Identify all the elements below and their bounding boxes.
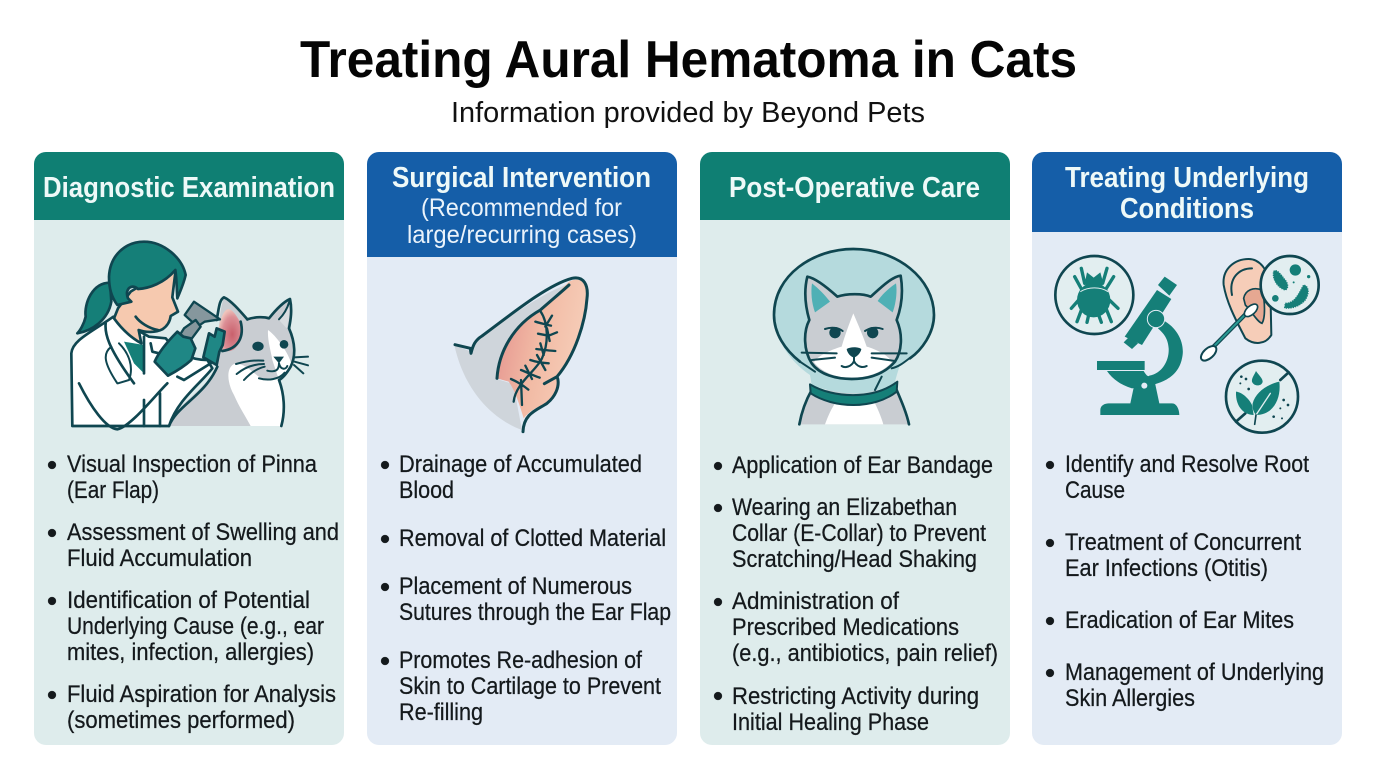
title: Treating Aural Hematoma in Cats: [300, 31, 1077, 89]
coat: [71, 317, 212, 426]
list: diagnostic steps: mites, infection, allergies): [67, 639, 314, 666]
list: surgical steps: Placement of Numerous: [399, 573, 632, 600]
header: surgical intervention: (Recommended for: [421, 194, 622, 222]
list: post-operative steps: Prescribed Medications: [732, 614, 959, 641]
ponytail: [77, 283, 111, 333]
list: surgical steps: Blood: [399, 477, 454, 504]
list: underlying conditions: Cause: [1065, 477, 1125, 504]
header: treating underlying conditions: Conditions: [1120, 193, 1254, 225]
header: surgical intervention: [367, 152, 677, 257]
list: post-operative steps: Application of Ear Bandage: [732, 452, 993, 479]
otoscope: [176, 302, 220, 347]
subtitle: Information provided by Beyond Pets: [451, 97, 925, 129]
head: [805, 276, 902, 379]
list: post-operative steps: Wearing an Elizabethan: [732, 494, 957, 521]
header: surgical intervention: large/recurring cases): [407, 221, 637, 249]
header: post-operative care: Post-Operative Care: [729, 172, 980, 204]
icon: ear mite: [1055, 256, 1133, 334]
list: diagnostic steps: Identification of Potential: [67, 587, 310, 614]
list: underlying conditions: Skin Allergies: [1065, 685, 1195, 712]
hair: [109, 242, 186, 305]
list: post-operative steps: Restricting Activity during: [732, 683, 979, 710]
icon group: causes and diagnosis: [1055, 256, 1319, 433]
panel: diagnostic examination: [34, 152, 344, 745]
stethoscope: [106, 343, 131, 383]
icon: microscope: [1097, 277, 1183, 415]
panel: surgical intervention: [367, 152, 677, 745]
list: surgical steps: Re-filling: [399, 699, 483, 726]
list: surgical steps: [381, 451, 671, 726]
header: diagnostic examination: [34, 152, 344, 220]
header: treating underlying conditions: [1032, 152, 1342, 232]
list: post-operative steps: Scratching/Head Shaking: [732, 546, 977, 573]
gloves: [155, 332, 195, 376]
list: diagnostic steps: (Ear Flap): [67, 477, 159, 504]
icon: ear with cotton swab: [1198, 256, 1319, 363]
list: diagnostic steps: Fluid Accumulation: [67, 545, 252, 572]
list: diagnostic steps: Underlying Cause (e.g., ear: [67, 613, 324, 640]
list: surgical steps: Promotes Re-adhesion of: [399, 647, 642, 674]
list: surgical steps: Skin to Cartilage to Prevent: [399, 673, 661, 700]
list: post-operative steps: Collar (E-Collar) to Prevent: [732, 520, 986, 547]
list: underlying conditions: Treatment of Concurrent: [1065, 529, 1301, 556]
list: post-operative steps: (e.g., antibiotics, pain relief): [732, 640, 998, 667]
icon: vet examining cat's ear: [71, 242, 308, 429]
header: treating underlying conditions: Treating Underlying: [1065, 162, 1309, 194]
icon: cat in e-collar: [774, 249, 934, 424]
list: underlying conditions: Management of Underlying: [1065, 659, 1324, 686]
neck and face: [114, 270, 178, 343]
panel: post-operative care: [700, 152, 1010, 745]
list: diagnostic steps: Assessment of Swelling and: [67, 519, 339, 546]
list: underlying conditions: Identify and Resolve Root: [1065, 451, 1309, 478]
list: surgical steps: Drainage of Accumulated: [399, 451, 642, 478]
list: underlying conditions: [1046, 451, 1324, 712]
list: post-operative steps: [714, 452, 998, 736]
list: underlying conditions: Ear Infections (Otitis): [1065, 555, 1268, 582]
panel: treating underlying conditions: [1032, 152, 1342, 745]
header: surgical intervention: Surgical Intervention: [392, 162, 651, 194]
list: diagnostic steps: (sometimes performed): [67, 707, 295, 734]
icon: no allergens: [1226, 361, 1298, 433]
list: post-operative steps: Administration of: [732, 588, 899, 615]
list: diagnostic steps: Visual Inspection of Pinna: [67, 451, 318, 478]
scrub top: [124, 342, 144, 373]
header: diagnostic examination: Diagnostic Examination: [43, 172, 335, 204]
list: surgical steps: Removal of Clotted Material: [399, 525, 666, 552]
list: diagnostic steps: Fluid Aspiration for Analysis: [67, 681, 336, 708]
collar band: [810, 382, 897, 405]
list: post-operative steps: Initial Healing Phase: [732, 709, 929, 736]
cone: [774, 249, 934, 394]
list: diagnostic steps: [48, 451, 339, 734]
icon: sutured ear: [454, 278, 587, 432]
header: post-operative care: [700, 152, 1010, 220]
list: underlying conditions: Eradication of Ear Mites: [1065, 607, 1294, 634]
list: surgical steps: Sutures through the Ear Flap: [399, 599, 671, 626]
